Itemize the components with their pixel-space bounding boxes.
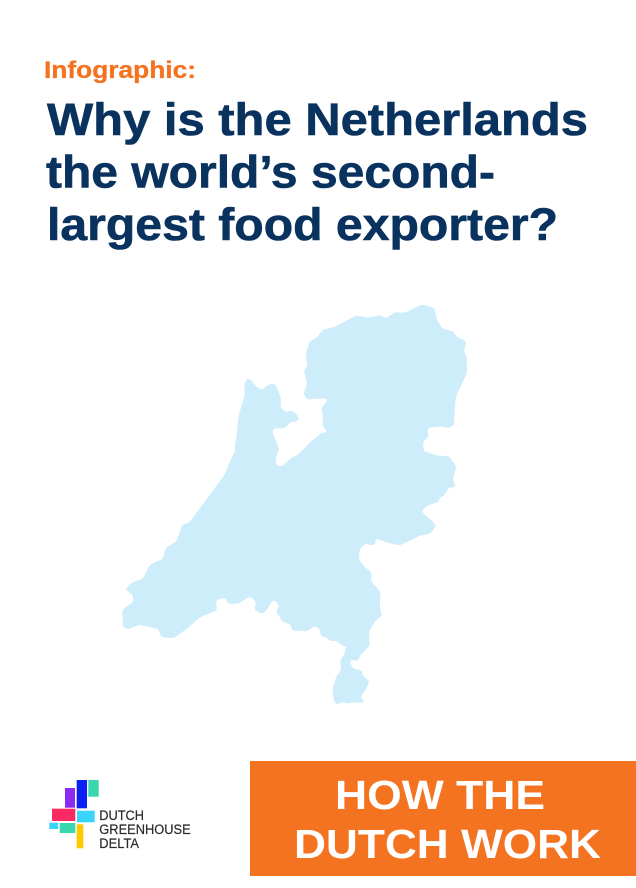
logo: Dutch Greenhouse Delta: [49, 780, 191, 851]
title: largest food exporter?: [47, 199, 558, 250]
banner: How the Dutch work: HOW THE: [335, 772, 545, 818]
logo wordmark: DELTA: [99, 836, 139, 851]
logo wordmark: [99, 808, 191, 851]
title: [46, 94, 588, 250]
banner: How the Dutch work: [250, 761, 636, 876]
banner: How the Dutch work: DUTCH WORK: [294, 821, 601, 867]
eyebrow label: Infographic:: [44, 57, 196, 84]
title: Why is the Netherlands: [47, 94, 588, 145]
logo mark: [49, 780, 99, 848]
logo wordmark: GREENHOUSE: [99, 822, 191, 837]
logo wordmark: DUTCH: [99, 808, 144, 823]
map of the Netherlands: [123, 305, 466, 704]
title: the world’s second-: [46, 146, 495, 198]
